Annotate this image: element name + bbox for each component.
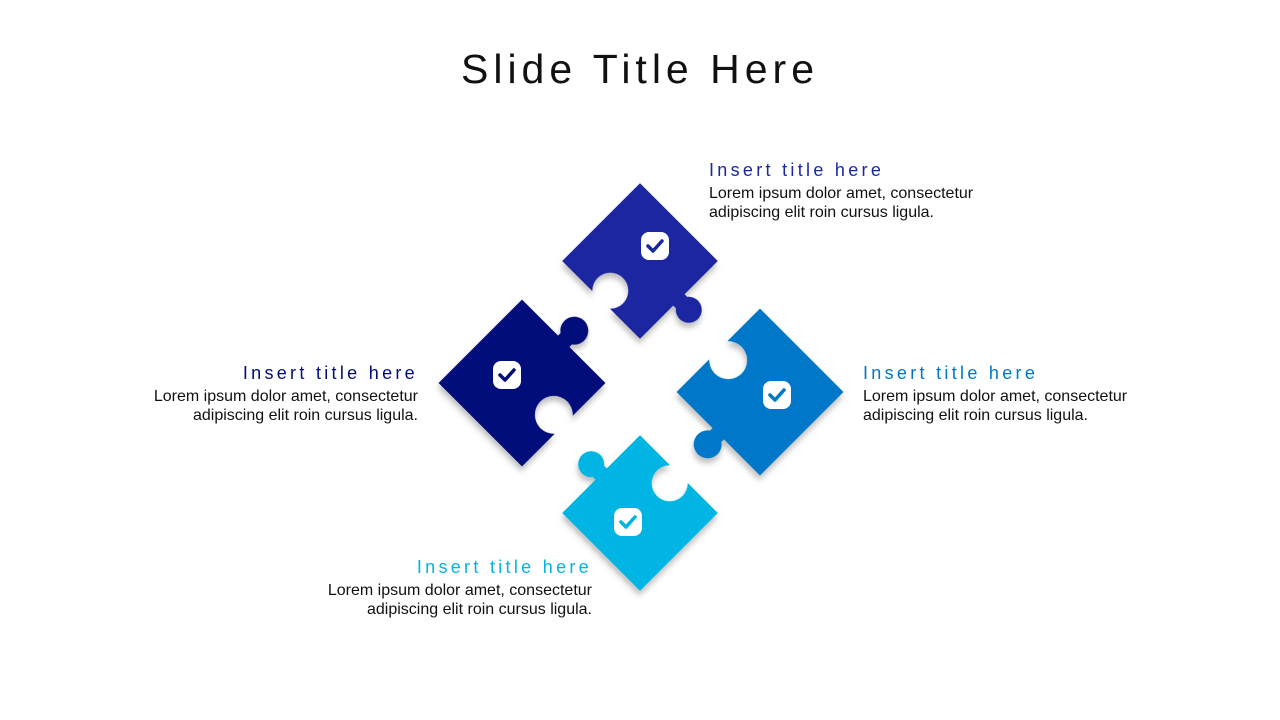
piece: right	[674, 308, 844, 482]
icon: check top	[641, 232, 669, 260]
text block: top: Lorem ipsum dolor amet, consectetur	[709, 185, 973, 202]
text block: top	[709, 160, 973, 221]
piece: top	[560, 183, 718, 345]
text block: bottom: adipiscing elit roin cursus ligula.	[367, 601, 592, 618]
text block: right: Insert title here	[863, 363, 1038, 383]
piece: left	[436, 300, 606, 473]
icon: check bottom	[614, 508, 642, 536]
puzzle graphic	[436, 183, 844, 597]
text block: left	[154, 363, 418, 424]
text block: left: Insert title here	[243, 363, 418, 383]
text block: top: Insert title here	[709, 160, 884, 180]
text block: left: Lorem ipsum dolor amet, consectetur	[154, 388, 418, 405]
text block: right: adipiscing elit roin cursus ligula.	[863, 407, 1088, 424]
text block: right: Lorem ipsum dolor amet, consectetur	[863, 388, 1127, 405]
text block: bottom: Insert title here	[417, 557, 592, 577]
text block: right	[863, 363, 1127, 424]
text block: left: adipiscing elit roin cursus ligula.	[193, 407, 418, 424]
text block: bottom	[328, 557, 592, 618]
icon: check left	[493, 361, 521, 389]
icon: check right	[763, 381, 791, 409]
piece: bottom	[560, 435, 718, 597]
text block: bottom: Lorem ipsum dolor amet, consectetur	[328, 582, 592, 599]
title: Slide Title Here	[461, 46, 819, 92]
text block: top: adipiscing elit roin cursus ligula.	[709, 204, 934, 221]
